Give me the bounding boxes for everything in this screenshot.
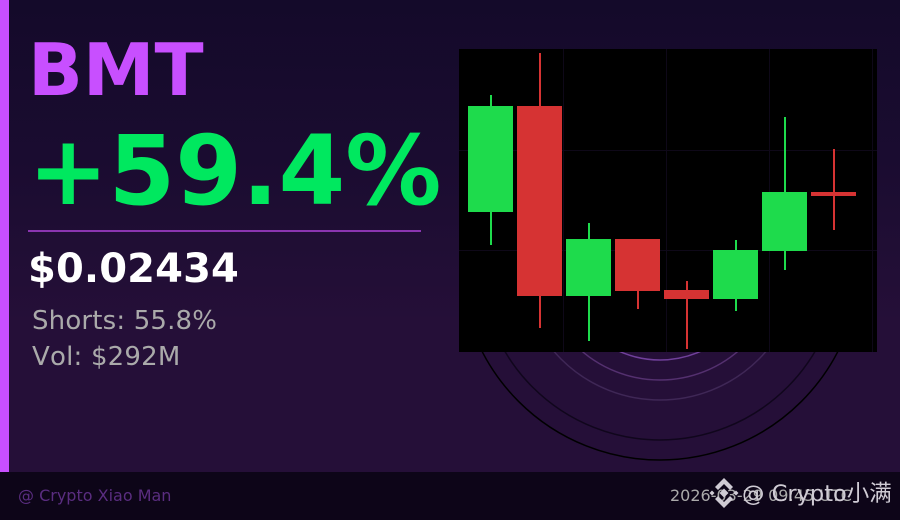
percent change: +59.4% [28, 115, 441, 227]
icon: binance diamond [710, 478, 738, 508]
price: $0.02434 [28, 246, 239, 292]
volume stat: Vol: $292M [32, 342, 181, 372]
footer bar [0, 472, 900, 520]
watermark [710, 478, 892, 508]
accent bar [0, 0, 9, 472]
footer date: 2026-03-29 09:45 UTC [670, 486, 852, 505]
ticker title: BMT [28, 28, 204, 112]
divider [28, 230, 421, 232]
shorts stat: Shorts: 55.8% [32, 306, 217, 336]
footer handle: @ Crypto Xiao Man [18, 486, 171, 505]
candlestick chart [459, 49, 877, 352]
watermark text: @ Crypto小满 [742, 481, 892, 507]
